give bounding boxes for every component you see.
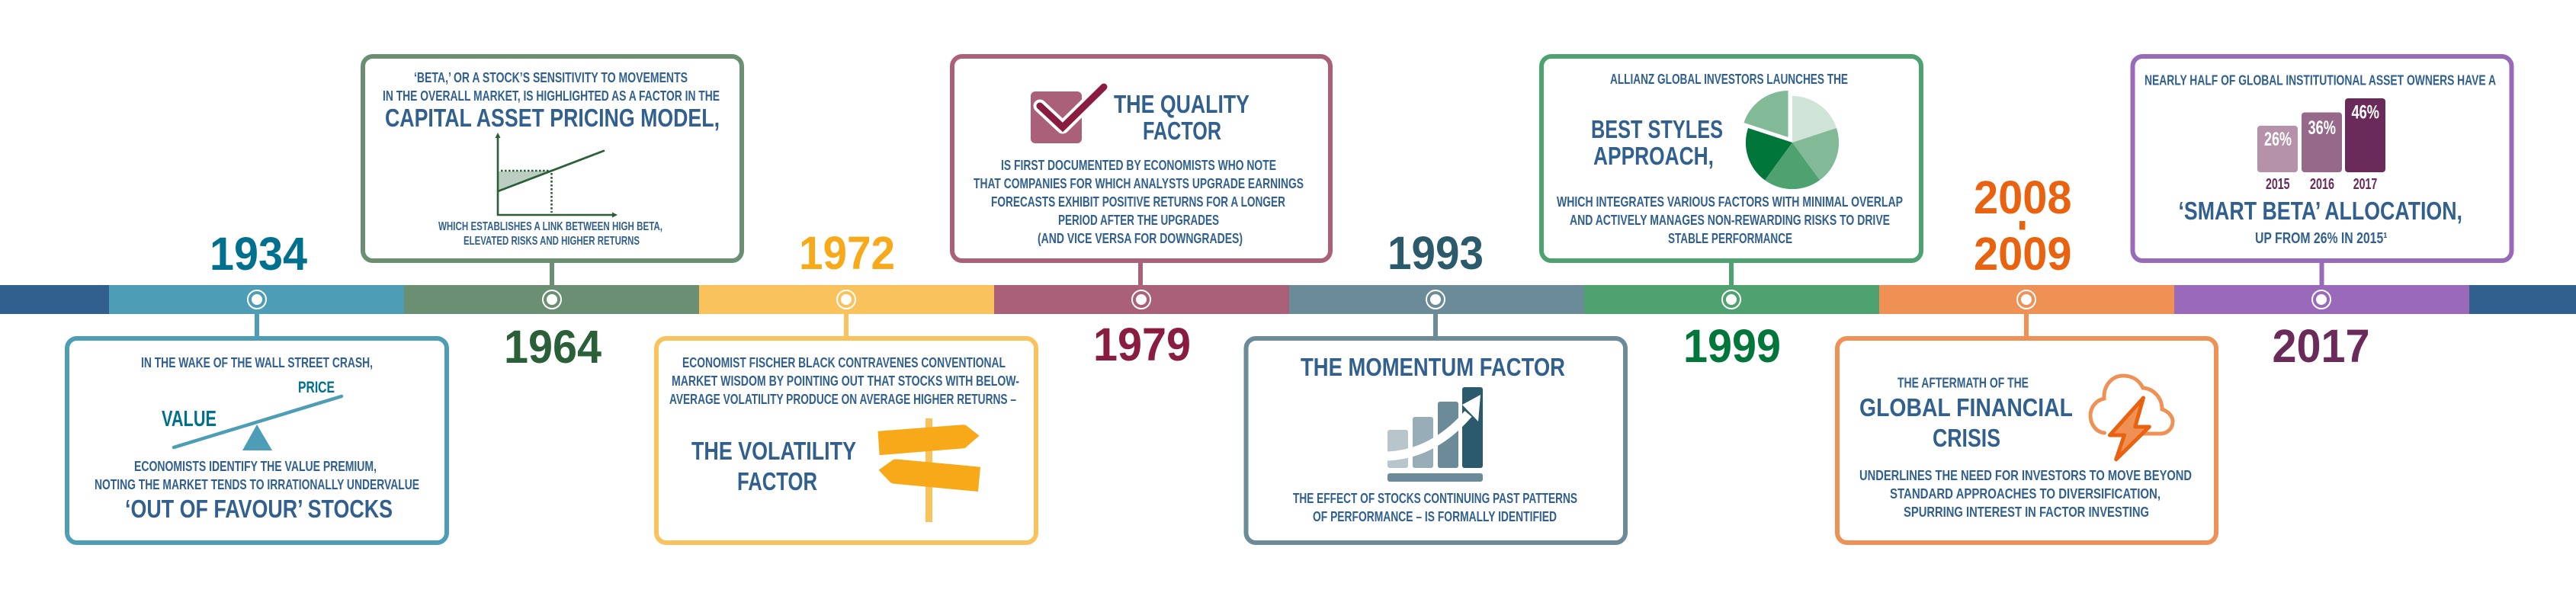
body text line 3: STABLE PERFORMANCE <box>1668 230 1792 246</box>
chart: allocation bars: 26% <box>2264 129 2292 150</box>
heading: the quality factor: FACTOR <box>1143 117 1221 145</box>
panel: 1993 momentum factor <box>1246 314 1625 543</box>
body text line 3: AVERAGE VOLATILITY PRODUCE ON AVERAGE HIGHER RETURNS – <box>669 391 1016 407</box>
chart: allocation bars: 46% <box>2351 102 2379 123</box>
heading: best styles approach: BEST STYLES <box>1591 115 1723 143</box>
panel: 1964 capital asset pricing model <box>363 56 742 285</box>
body text line 5: (AND VICE VERSA FOR DOWNGRADES) <box>1038 230 1243 246</box>
body text line 3: SPURRING INTEREST IN FACTOR INVESTING <box>1904 504 2149 520</box>
timeline markers <box>248 290 2331 309</box>
body text: WHICH INTEGRATES VARIOUS FACTORS WITH MINIMAL OVERLAP <box>1557 194 1903 210</box>
highlight: out of favour stocks: ‘OUT OF FAVOUR’ STOCKS <box>125 495 393 523</box>
heading: best styles approach <box>1591 115 1723 170</box>
year 1999: 1999 <box>1683 320 1781 372</box>
year 1934: 1934 <box>210 228 307 280</box>
panel: 2017 smart beta allocation <box>2133 56 2511 285</box>
heading: global financial crisis: GLOBAL FINANCIAL <box>1859 393 2073 421</box>
icon: signpost <box>878 418 980 522</box>
body text: THE EFFECT OF STOCKS CONTINUING PAST PATTERNS <box>1293 490 1577 506</box>
body text: ECONOMISTS IDENTIFY THE VALUE PREMIUM, <box>134 458 377 474</box>
heading: the momentum factor: THE MOMENTUM FACTOR <box>1301 353 1565 381</box>
highlight: capital asset pricing model: CAPITAL ASSET PRICING MODEL, <box>385 104 720 132</box>
heading: the quality factor: THE QUALITY <box>1114 90 1250 118</box>
heading: the volatility factor <box>691 437 856 495</box>
icon: storm cloud with lightning bolt <box>2090 376 2173 460</box>
panel: 2008-2009 global financial crisis <box>1837 314 2216 543</box>
heading: global financial crisis <box>1859 393 2073 452</box>
body text line 2: THAT COMPANIES FOR WHICH ANALYSTS UPGRADE EARNINGS <box>974 175 1304 191</box>
year 2008-2009: 2009 <box>1974 228 2072 280</box>
intro text: ALLIANZ GLOBAL INVESTORS LAUNCHES THE <box>1610 71 1848 87</box>
year 2017: 2017 <box>2272 320 2369 372</box>
icon: check mark <box>1031 87 1104 143</box>
chart: pie of five equal slices <box>1744 91 1839 189</box>
panel: 1999 best styles approach <box>1541 56 1921 285</box>
intro text: THE AFTERMATH OF THE <box>1898 375 2029 390</box>
intro text line 2: IN THE OVERALL MARKET, IS HIGHLIGHTED AS A FACTOR IN THE <box>383 88 720 104</box>
panel: 1979 quality factor <box>952 56 1330 285</box>
body text line 2: OF PERFORMANCE – IS FORMALLY IDENTIFIED <box>1313 508 1557 524</box>
intro text: ‘BETA,’ OR A STOCK’S SENSITIVITY TO MOVEMENTS <box>414 69 688 85</box>
heading: best styles approach: APPROACH, <box>1593 142 1714 170</box>
panel: 1972 volatility factor <box>656 314 1036 543</box>
heading: the volatility factor: FACTOR <box>737 467 817 495</box>
body text: IS FIRST DOCUMENTED BY ECONOMISTS WHO NOTE <box>1001 157 1276 173</box>
year 1993: 1993 <box>1387 227 1484 279</box>
chart: allocation bars: 2017 <box>2353 175 2377 193</box>
panel: 1934 value premium <box>67 314 447 543</box>
body text line 4: PERIOD AFTER THE UPGRADES <box>1058 212 1219 228</box>
year 1979: 1979 <box>1093 319 1191 370</box>
chart: allocation bars: 2015 <box>2266 175 2290 193</box>
caption: WHICH ESTABLISHES A LINK BETWEEN HIGH BETA, <box>438 220 662 233</box>
year 2008-2009: 2008 <box>1974 171 2072 223</box>
body text line 3: FORECASTS EXHIBIT POSITIVE RETURNS FOR A LONGER <box>991 194 1285 210</box>
heading: global financial crisis: CRISIS <box>1933 424 2000 452</box>
chart: allocation bars: 2016 <box>2310 175 2334 193</box>
timeline bar <box>0 285 2576 314</box>
intro text: IN THE WAKE OF THE WALL STREET CRASH, <box>141 354 373 370</box>
highlight: smart beta allocation: ‘SMART BETA’ ALLOCATION, <box>2179 197 2462 225</box>
body text line 2: AND ACTIVELY MANAGES NON-REWARDING RISKS TO DRIVE <box>1570 212 1890 228</box>
body text line 2: MARKET WISDOM BY POINTING OUT THAT STOCKS WITH BELOW- <box>672 373 1019 389</box>
icon: seesaw with value and price: VALUE <box>162 407 217 431</box>
icon: seesaw with value and price <box>162 379 342 450</box>
chart: allocation bars: 36% <box>2308 117 2336 139</box>
icon: seesaw with value and price: PRICE <box>298 379 335 396</box>
year 1972: 1972 <box>799 227 895 279</box>
year 2008-2009 <box>1974 171 2072 280</box>
chart: allocation bars <box>2257 98 2385 193</box>
body text: UNDERLINES THE NEED FOR INVESTORS TO MOVE BEYOND <box>1859 467 2192 483</box>
heading: the quality factor <box>1114 90 1250 145</box>
body text line 2: NOTING THE MARKET TENDS TO IRRATIONALLY UNDERVALUE <box>95 476 419 492</box>
chart: beta line <box>496 133 618 218</box>
caption line 2: ELEVATED RISKS AND HIGHER RETURNS <box>464 235 640 248</box>
body text: ECONOMIST FISCHER BLACK CONTRAVENES CONVENTIONAL <box>682 354 1006 370</box>
caption: UP FROM 26% IN 2015¹ <box>2255 229 2388 247</box>
icon: rising bar chart with arrow <box>1387 387 1483 482</box>
body text line 2: STANDARD APPROACHES TO DIVERSIFICATION, <box>1890 485 2161 501</box>
year 1964: 1964 <box>504 321 601 373</box>
heading: the volatility factor: THE VOLATILITY <box>691 437 856 465</box>
